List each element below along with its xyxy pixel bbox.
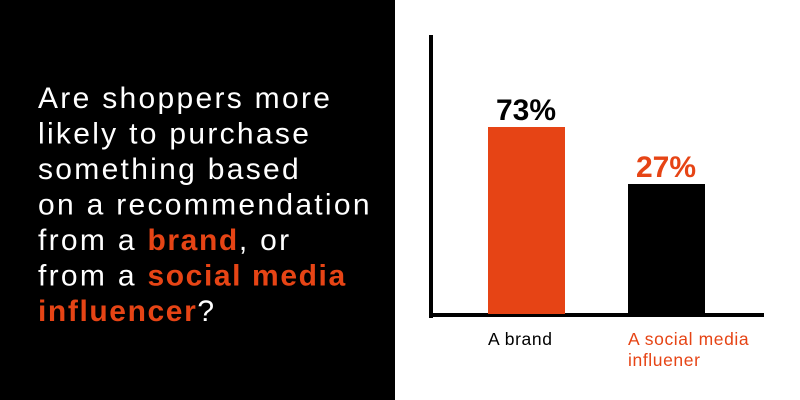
- bar: a brand 73%: 73%: [496, 94, 556, 127]
- x-axis labels: influener: [628, 350, 701, 370]
- question text: on a recommendation: [38, 188, 372, 222]
- bar: social media influencer 27%: [628, 151, 705, 314]
- x-axis labels: A brand: [488, 329, 553, 349]
- question text: likely to purchase: [38, 118, 311, 150]
- question text: from a social media: [38, 260, 347, 292]
- bar: a brand 73%: [488, 94, 565, 314]
- question text: influencer?: [38, 295, 216, 328]
- question text: [38, 82, 372, 328]
- axes: [429, 35, 764, 318]
- panel: left black question panel: [0, 0, 395, 400]
- question text: Are shoppers more: [38, 82, 332, 115]
- question text: something based: [38, 153, 301, 186]
- bar chart: [429, 35, 764, 370]
- x-axis labels: A social media: [628, 329, 749, 349]
- bar: social media influencer 27%: 27%: [636, 151, 696, 184]
- question text: from a brand, or: [38, 224, 291, 257]
- x-axis labels: [488, 329, 749, 370]
